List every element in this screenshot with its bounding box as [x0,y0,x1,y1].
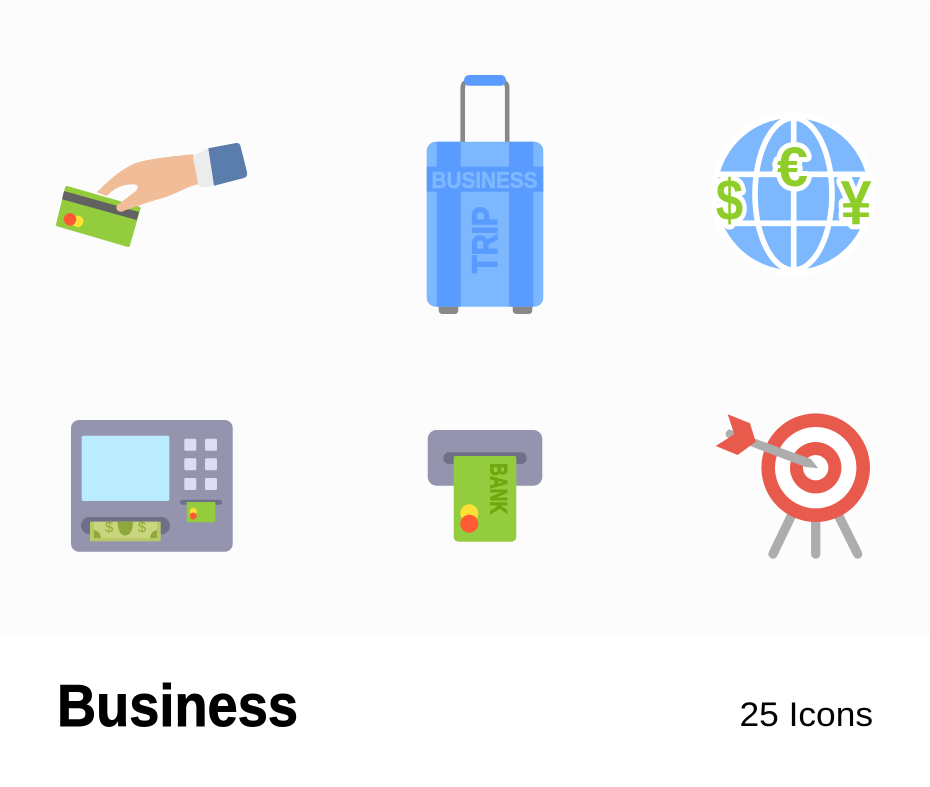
icon: target with arrow [716,413,870,554]
banknote [90,519,161,541]
icon: ATM machine [71,420,233,552]
card magnetic stripe [62,191,139,220]
card slot [180,500,222,505]
left strap [437,142,461,307]
icon: business trip suitcase [427,75,543,314]
target rings [761,413,870,522]
right strap [509,142,533,307]
title: Business [57,673,298,739]
target legs [773,515,858,554]
ATM body [71,420,233,552]
credit card [58,188,138,245]
icon: bank card in slot [428,430,542,542]
dollar symbol: $ [716,168,743,233]
card logo yellow circle [72,216,83,227]
label: BANK: BANK [484,463,512,514]
card chip red [190,512,197,520]
card chip yellow [190,508,197,515]
banknote: $ [138,519,147,536]
reader body [428,430,542,486]
reader slot [443,452,527,464]
bank card [454,456,516,542]
right wheel [513,306,532,314]
inserted card [187,502,215,522]
icon: globe with currencies [711,112,875,276]
handle grip [464,75,506,86]
keypad [184,439,217,490]
horizontal band [427,167,543,192]
arrow fletching [716,414,756,455]
icon: hand holding credit card [58,143,247,245]
label: BUSINESS: BUSINESS [432,167,538,193]
arrow shaft [726,429,818,468]
hand [97,154,198,212]
ATM screen [82,436,169,501]
label: TRIP: TRIP [466,207,505,273]
globe grid lines [716,116,870,272]
banknote: $ [105,519,114,536]
globe halo [711,112,875,276]
left wheel [439,306,458,314]
cash slot [81,517,170,534]
globe disc [717,118,869,270]
euro symbol: € [777,135,808,198]
yen symbol: ¥ [840,169,872,238]
card chip yellow [460,504,478,522]
card chip red [460,515,478,533]
card logo red circle [64,213,76,226]
jacket sleeve [208,143,247,186]
shirt cuff [193,148,214,187]
suitcase handle frame [463,82,507,142]
icon count: 25 Icons [740,696,873,734]
suitcase body [427,142,543,307]
